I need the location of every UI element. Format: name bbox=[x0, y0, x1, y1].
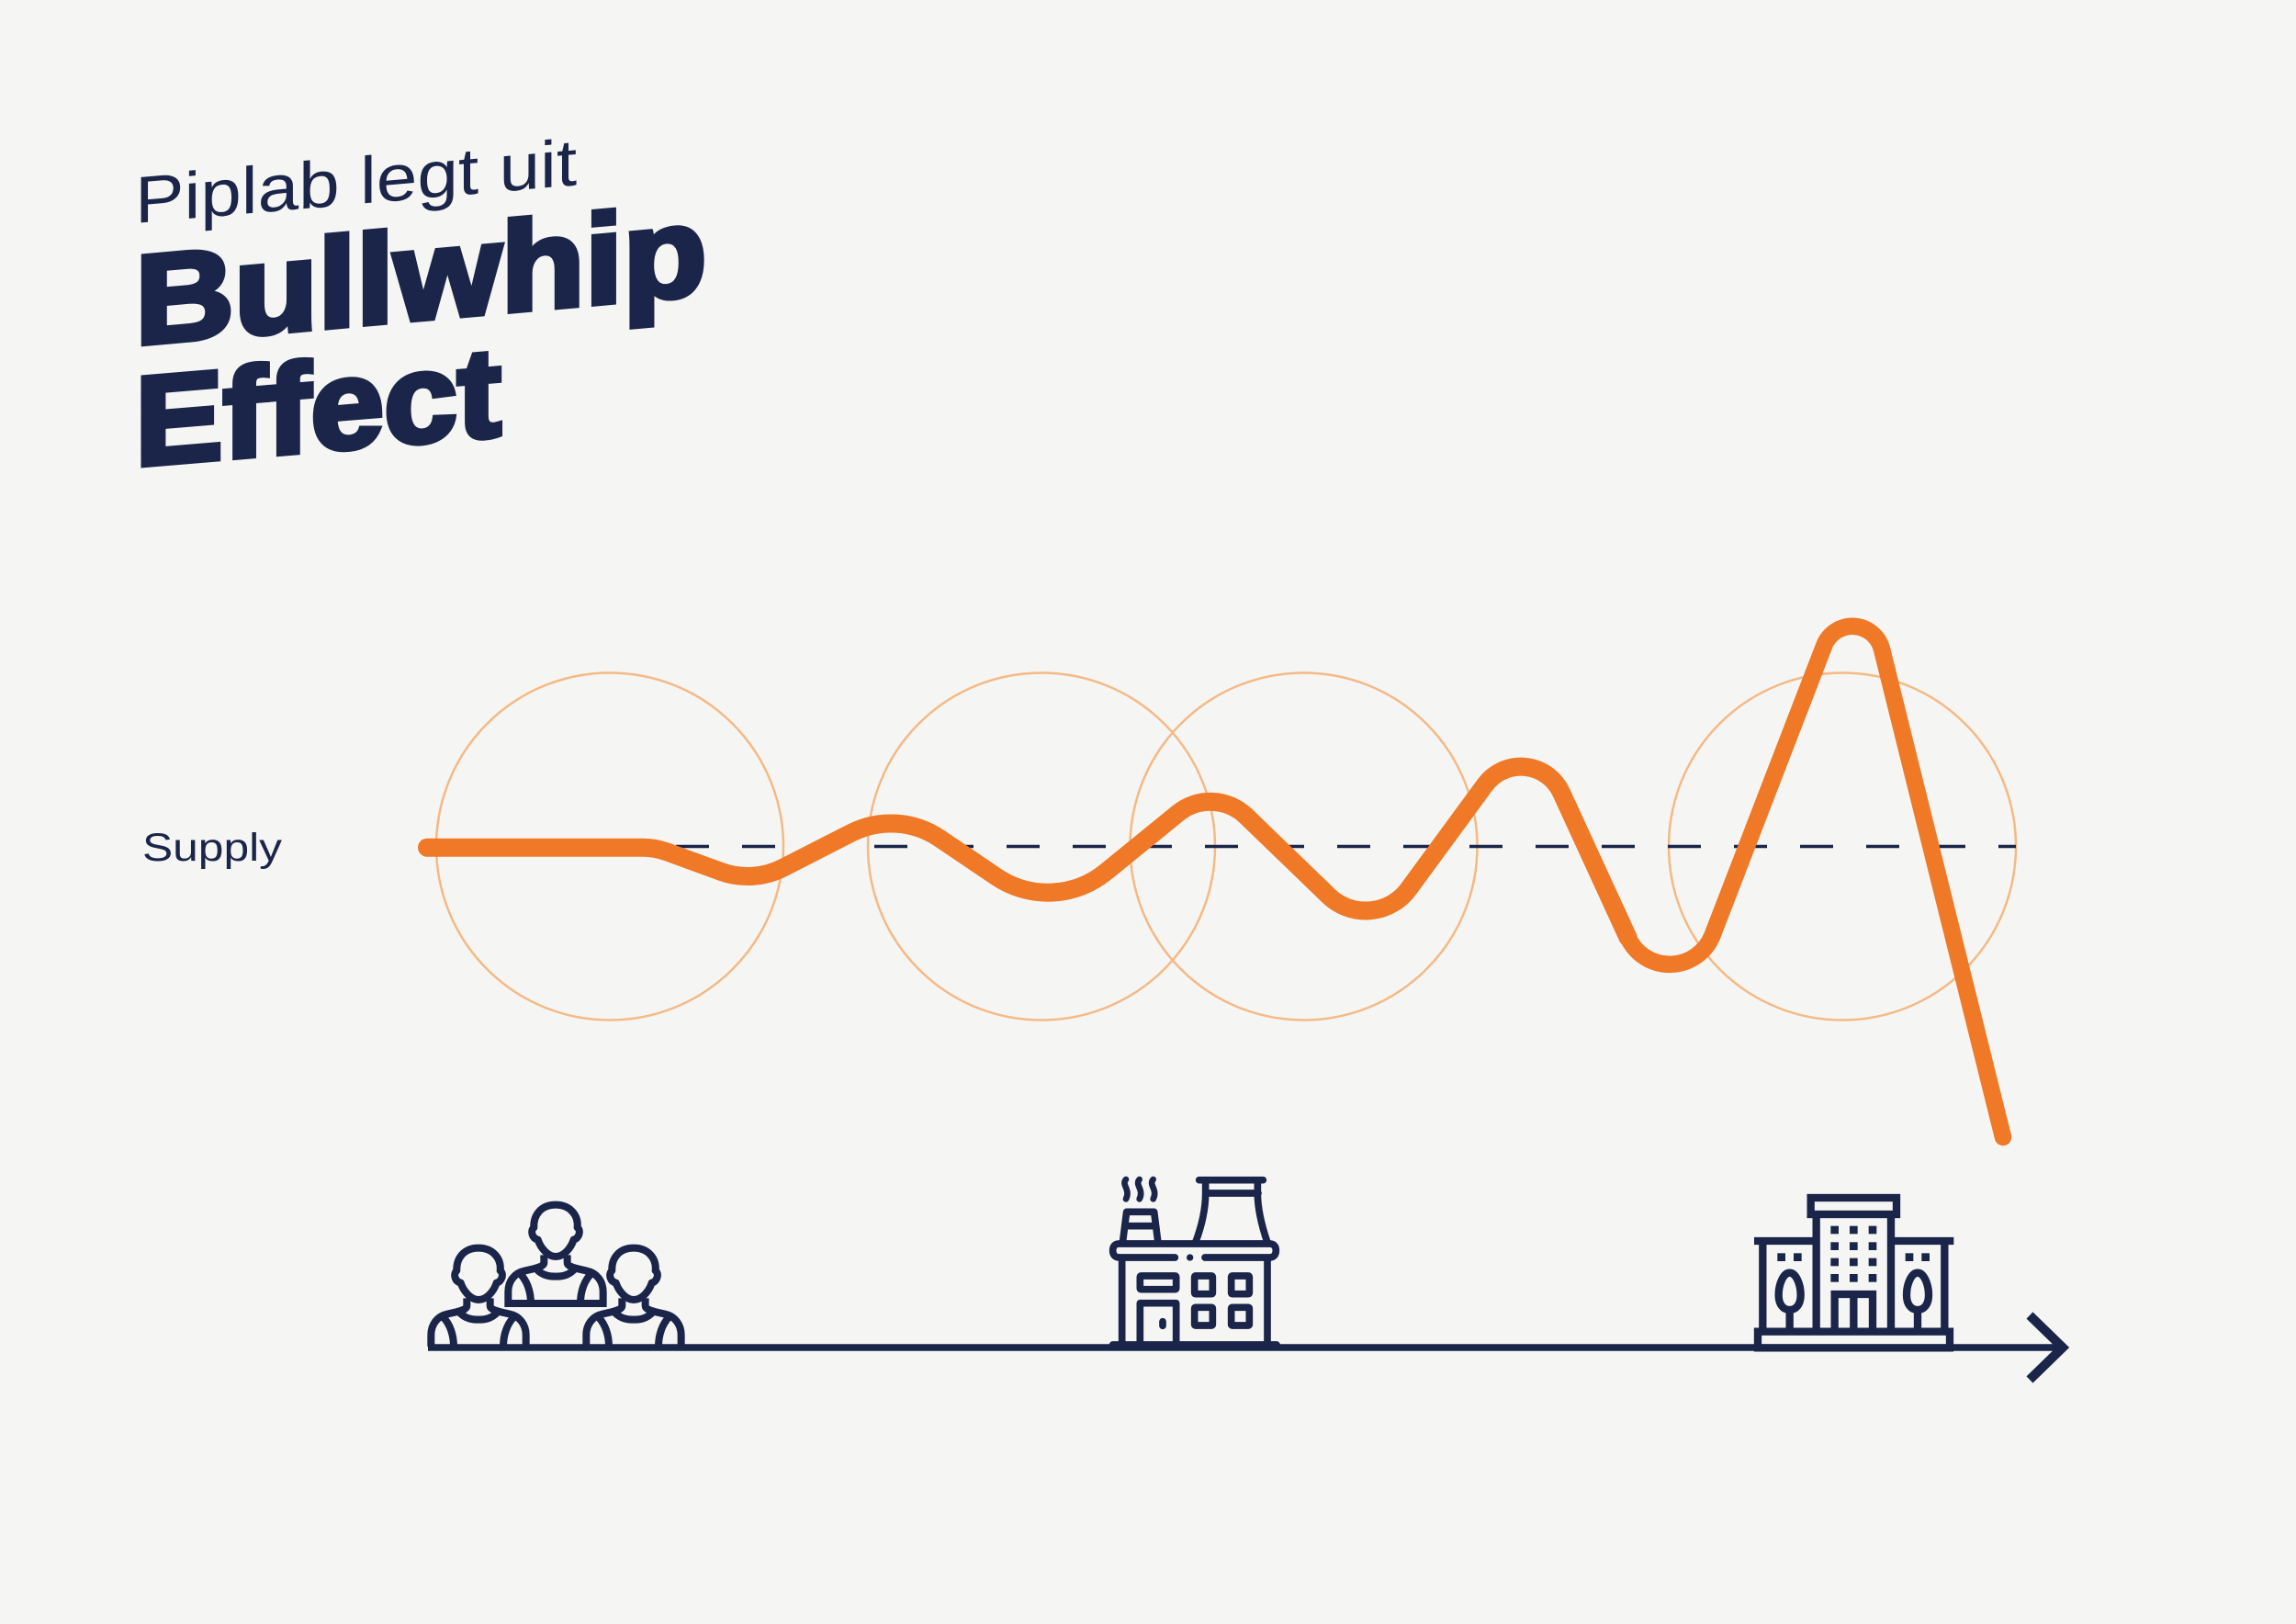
bullwhip curve bbox=[427, 626, 2003, 1137]
top sign bbox=[1811, 1198, 1896, 1214]
factory background knock-out bbox=[1122, 1258, 1267, 1344]
cooling tower bbox=[1196, 1180, 1267, 1243]
tree left bbox=[1779, 1273, 1801, 1332]
roof band bbox=[1113, 1244, 1276, 1257]
customer centre bbox=[508, 1205, 603, 1303]
roof dot bbox=[1187, 1254, 1193, 1261]
tower door bbox=[1835, 1294, 1873, 1332]
base plinth bbox=[1758, 1332, 1950, 1348]
title: Effect: Effect bbox=[135, 321, 501, 492]
windows bbox=[1777, 1226, 1930, 1282]
building knock-out bbox=[1758, 1332, 1950, 1348]
tower and wings bbox=[1754, 1214, 1953, 1332]
title: Bullwhip: Bullwhip bbox=[135, 179, 707, 372]
icon: customers bbox=[431, 1205, 681, 1347]
stage circles bbox=[436, 672, 2016, 1020]
dashed supply baseline bbox=[676, 845, 2016, 848]
title: intro line: Piplab legt uit bbox=[135, 126, 577, 238]
title block bbox=[135, 126, 707, 492]
customer right bbox=[586, 1248, 681, 1347]
label: Supply: Supply bbox=[142, 826, 283, 870]
tree right bbox=[1907, 1273, 1929, 1332]
small chimney bbox=[1122, 1212, 1158, 1243]
icon: office building bbox=[1754, 1198, 1953, 1348]
icon: factory bbox=[1113, 1179, 1277, 1345]
smoke bbox=[1124, 1179, 1154, 1199]
customer left bbox=[431, 1248, 526, 1347]
windows bbox=[1140, 1276, 1249, 1325]
door bbox=[1140, 1303, 1176, 1344]
supply chart bbox=[427, 626, 2016, 1137]
timeline arrow bbox=[428, 1315, 2063, 1380]
walls and ground bbox=[1113, 1258, 1277, 1345]
